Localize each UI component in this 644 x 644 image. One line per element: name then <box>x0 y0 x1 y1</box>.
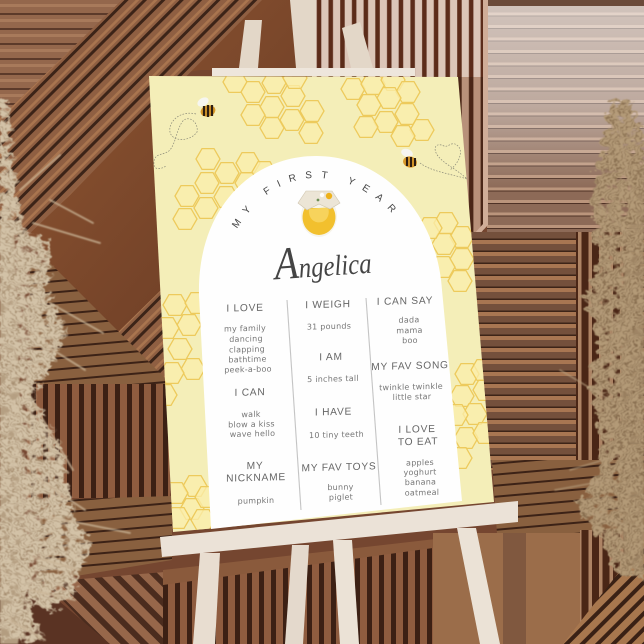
column 2: MY FAV TOYS <box>302 461 376 474</box>
column 3: banana <box>405 477 436 487</box>
icon: bee left <box>196 96 217 118</box>
icon: bee right <box>400 147 418 169</box>
bee flight trails <box>154 113 467 179</box>
column 1 <box>224 302 286 506</box>
column 3: apples <box>406 458 434 468</box>
column 1: MY <box>247 461 263 472</box>
pampas grass left <box>0 95 130 644</box>
column 1: my family <box>224 324 266 334</box>
column 1: I CAN <box>235 387 265 399</box>
column 3: yoghurt <box>403 467 437 477</box>
honeycomb clusters <box>153 68 497 530</box>
column 2: 31 pounds <box>307 322 351 332</box>
easel shelf and front legs <box>160 501 518 644</box>
column 2: I WEIGH <box>305 299 351 311</box>
column 1: walk <box>241 410 261 419</box>
column 1: pumpkin <box>238 496 274 506</box>
column 3: MY FAV SONG <box>371 360 449 373</box>
column 1: I LOVE <box>226 303 264 315</box>
column 3: oatmeal <box>405 488 439 498</box>
column 3: I LOVE <box>398 424 436 436</box>
column 3: boo <box>402 336 418 345</box>
column 3: I CAN SAY <box>377 295 433 308</box>
easel back legs <box>212 0 415 76</box>
column 1: dancing <box>229 334 263 344</box>
column 1: bathtime <box>228 355 267 365</box>
column 2: 10 tiny teeth <box>309 430 364 440</box>
column 2: 5 inches tall <box>307 374 359 384</box>
column 3: mama <box>396 326 423 335</box>
column 3 <box>371 295 449 499</box>
arc title: MY FIRST YEAR <box>232 171 396 228</box>
white arch panel <box>199 156 462 529</box>
column 1: peek-a-boo <box>224 364 272 375</box>
column 3: little star <box>393 392 432 402</box>
board <box>149 68 497 532</box>
column 1: blow a kiss <box>228 419 275 430</box>
column 2: I HAVE <box>315 407 352 418</box>
column dividers <box>287 298 381 510</box>
column 2: piglet <box>329 492 353 502</box>
column 2 <box>302 298 376 503</box>
pampas grass right <box>555 100 644 580</box>
column 3: TO EAT <box>398 436 438 448</box>
column 2: I AM <box>319 352 343 363</box>
name script: Angelica <box>270 232 373 290</box>
column 3: dada <box>399 315 419 325</box>
column 2: bunny <box>327 482 354 492</box>
column 3: twinkle twinkle <box>379 382 443 392</box>
column 1: NICKNAME <box>226 472 286 485</box>
icon: honey jar <box>298 191 340 237</box>
column 1: wave hello <box>230 429 275 439</box>
column 1: clapping <box>229 345 265 355</box>
columns of text <box>224 295 449 506</box>
